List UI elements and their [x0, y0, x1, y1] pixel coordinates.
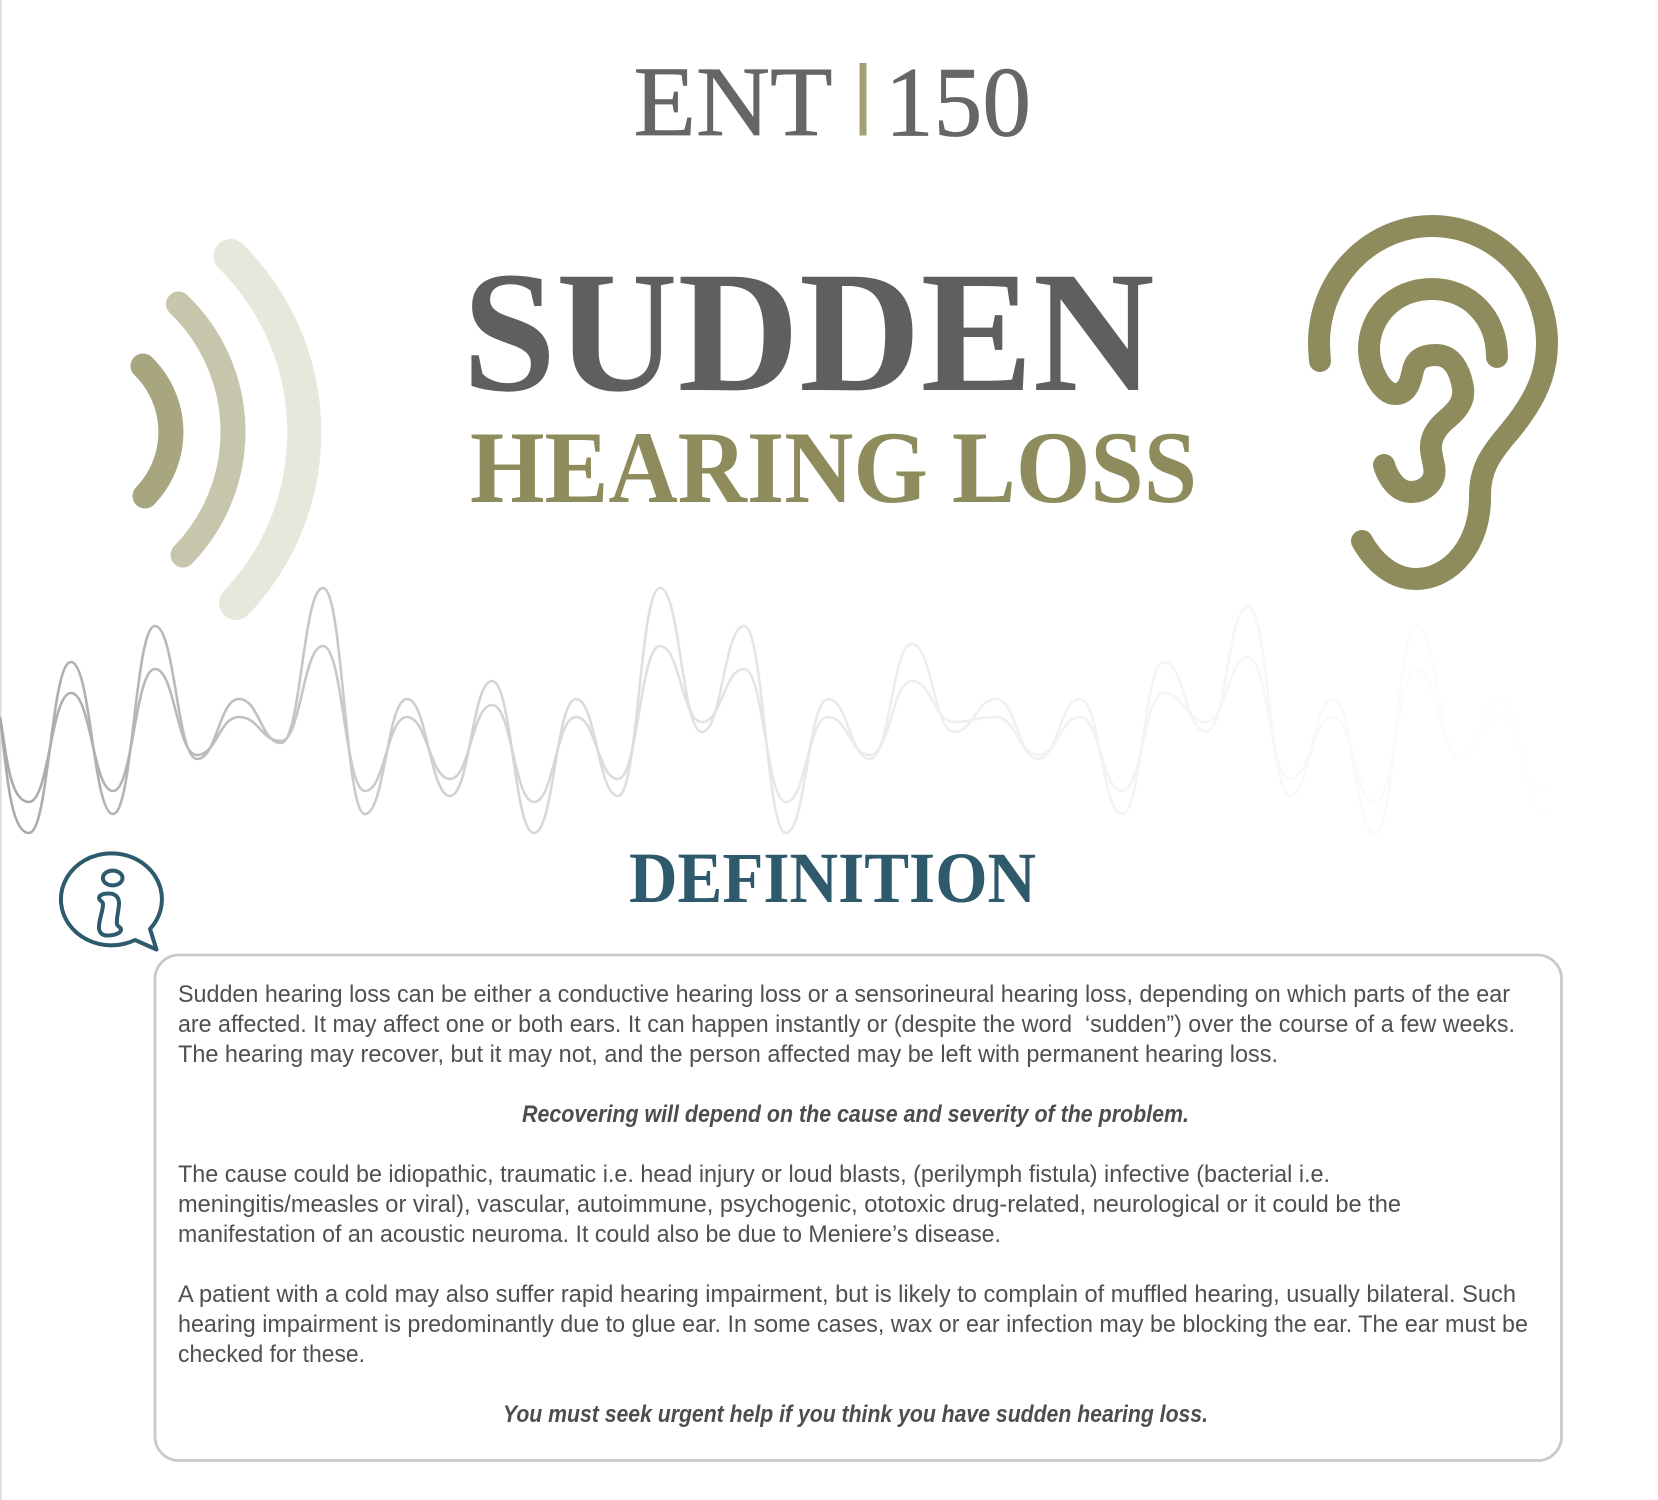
- text: causes paragraph: manifestation of an acoustic neuroma. It could also be due to Meniere’s disease.: [178, 1221, 1001, 1248]
- icon: sound waves: [143, 256, 304, 603]
- icon: ear: [1319, 226, 1547, 579]
- chart: fading sound waveform: [0, 588, 1585, 833]
- heading: DEFINITION: DEFINITION: [629, 839, 1036, 918]
- text: causes paragraph: [178, 1161, 1401, 1248]
- text: cold and glue ear paragraph: A patient with a cold may also suffer rapid hearing impairment, but is likely to complain of muffled hearing, usually bilateral. Such: [178, 1281, 1516, 1308]
- text: causes paragraph: The cause could be idiopathic, traumatic i.e. head injury or loud blasts, (perilymph fistula) infective (bacterial i.e.: [178, 1161, 1330, 1188]
- text: opening paragraph: are affected. It may affect one or both ears. It can happen instantly or (despite the word ‘sudden”) over the course of a few weeks.: [178, 1011, 1515, 1038]
- callout: recovery note: Recovering will depend on the cause and severity of the problem.: [522, 1101, 1189, 1128]
- title: SUDDEN: SUDDEN: [462, 237, 1154, 428]
- text: cold and glue ear paragraph: hearing impairment is predominantly due to glue ear. In some cases, wax or ear infection may be blocking the ear. The ear must be: [178, 1311, 1528, 1338]
- text: opening paragraph: [178, 981, 1515, 1068]
- logo: ENT 150: 150: [885, 46, 1031, 158]
- callout: urgent help note: You must seek urgent help if you think you have sudden hearing loss.: [503, 1401, 1208, 1428]
- logo: ENT 150: [634, 46, 1031, 158]
- text: cold and glue ear paragraph: checked for these.: [178, 1341, 365, 1368]
- text: opening paragraph: Sudden hearing loss can be either a conductive hearing loss or a sensorineural hearing loss, depending on which parts of the ear: [178, 981, 1510, 1008]
- text: opening paragraph: The hearing may recover, but it may not, and the person affected may be left with permanent hearing loss.: [178, 1041, 1278, 1068]
- text: cold and glue ear paragraph: [178, 1281, 1528, 1368]
- panel: definition text box: [155, 955, 1562, 1460]
- subtitle: HEARING LOSS: HEARING LOSS: [470, 411, 1197, 525]
- text: causes paragraph: meningitis/measles or viral), vascular, autoimmune, psychogenic, ototoxic drug-related, neurological or it could be the: [178, 1191, 1401, 1218]
- logo: ENT 150: ENT: [634, 46, 832, 157]
- icon: information speech bubble: [61, 853, 162, 950]
